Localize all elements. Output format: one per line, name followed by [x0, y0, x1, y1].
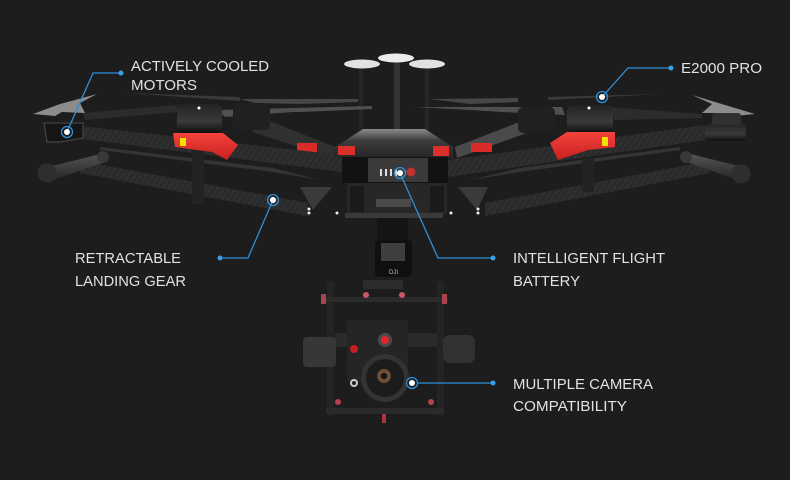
left gimbal motor [303, 337, 336, 367]
center body [300, 129, 488, 218]
callout: intelligent flight battery: BATTERY [513, 273, 580, 290]
callout: actively cooled motors: ACTIVELY COOLED [131, 58, 269, 75]
callout: actively cooled motors [62, 58, 269, 138]
callout: retractable landing gear: LANDING GEAR [75, 273, 186, 290]
callout: E2000 Pro: E2000 PRO [681, 60, 762, 77]
callout: retractable landing gear: RETRACTABLE [75, 250, 181, 267]
left red motor unit [173, 104, 238, 160]
callout: multiple camera compatibility: MULTIPLE CAMERA [513, 376, 653, 393]
callout: multiple camera compatibility: COMPATIBILITY [513, 398, 627, 415]
right tip motor [705, 113, 746, 141]
callout: actively cooled motors: MOTORS [131, 77, 197, 94]
right lower strut [470, 147, 680, 180]
GPS antennas [344, 54, 445, 152]
callout: E2000 Pro [596, 60, 762, 102]
inner right arm and motor [455, 107, 555, 158]
callout: intelligent flight battery: INTELLIGENT FLIGHT [513, 250, 665, 267]
left propellers [33, 93, 372, 120]
right red motor unit [550, 105, 615, 160]
camera body and lens [347, 320, 409, 402]
right landing gear [485, 151, 750, 216]
drone illustration [33, 54, 755, 423]
gimbal mount [375, 218, 412, 277]
camera cage [321, 280, 448, 423]
left landing gear [38, 150, 308, 216]
left tip motor [44, 123, 83, 142]
gimbal mount: DJI [389, 270, 398, 276]
callout: retractable landing gear [75, 194, 278, 290]
right gimbal motor [443, 335, 475, 363]
callout: multiple camera compatibility [406, 376, 653, 415]
left lower strut [100, 147, 320, 180]
right propellers [415, 94, 755, 120]
left upper carbon arm [80, 126, 342, 172]
inner left arm and motor [233, 103, 335, 158]
right upper carbon arm [448, 125, 705, 177]
callout: intelligent flight battery [394, 168, 665, 290]
